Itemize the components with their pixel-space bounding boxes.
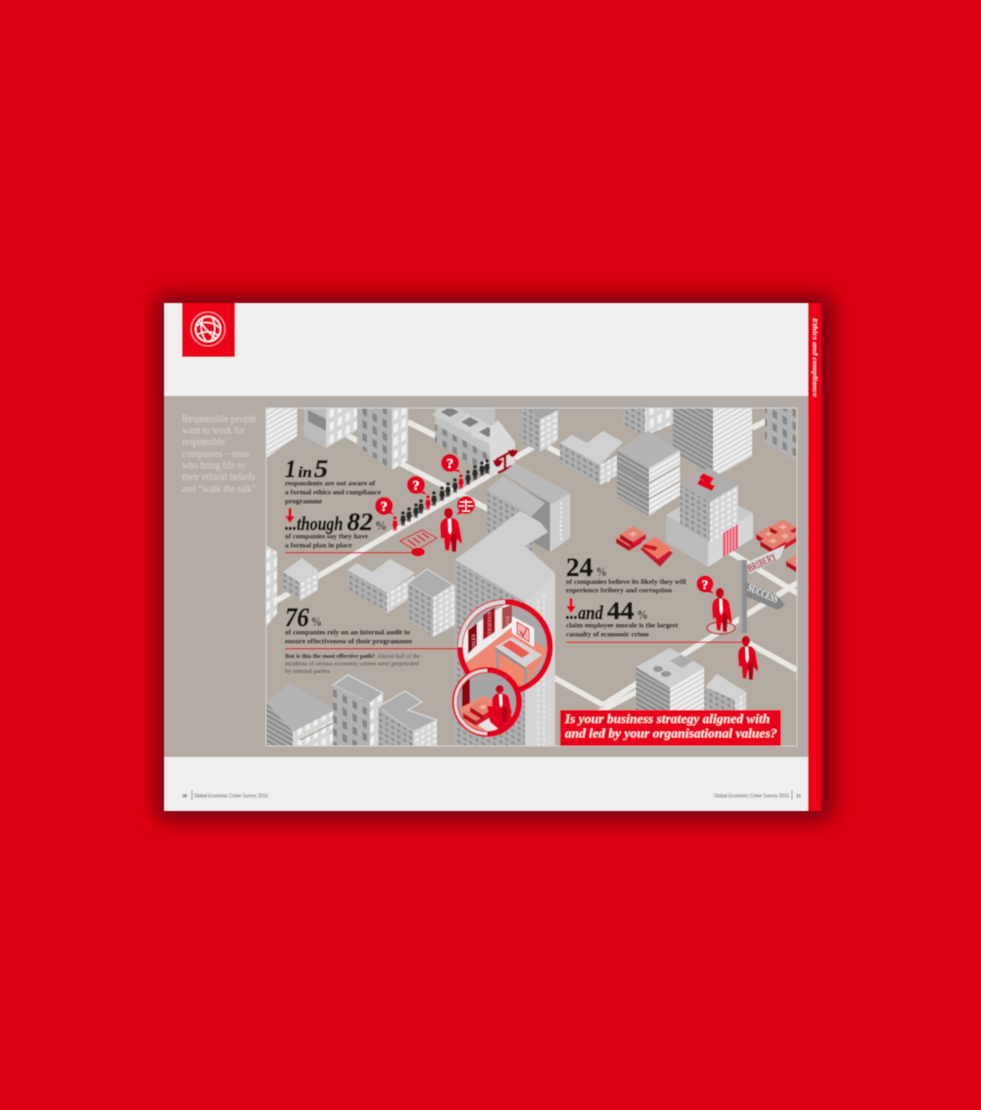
building: police station bbox=[666, 467, 753, 567]
stat: and 44%: ...and bbox=[566, 603, 603, 624]
stat: 76%: 76 bbox=[285, 603, 309, 632]
building: floors block bbox=[617, 431, 680, 516]
icon: scales on factory bbox=[493, 450, 518, 473]
stat: 24%: % bbox=[596, 564, 607, 579]
building: factory bbox=[432, 403, 518, 478]
panel: white page bbox=[164, 303, 808, 811]
callout: strategy question: and led by your organisational values? bbox=[565, 726, 777, 740]
icon: monitor bbox=[512, 616, 534, 651]
building: windows block bbox=[623, 408, 673, 436]
building: big striped tower bbox=[673, 408, 752, 478]
building: low L-block bbox=[347, 559, 415, 613]
note: internal parties bbox=[285, 653, 420, 675]
footer: left page: Global Economic Crime Survey 2015 bbox=[194, 794, 268, 800]
stat: and 44%: claim employee morale is the largest bbox=[566, 620, 679, 630]
callout: strategy question bbox=[560, 710, 781, 746]
intro text: who bring life to bbox=[182, 460, 245, 472]
stat: 1 in 5: programme bbox=[285, 496, 323, 506]
figure: man at signpost bbox=[712, 588, 732, 632]
icon: question bubble 1: ? bbox=[446, 457, 454, 472]
banner: vol: VOL bbox=[505, 615, 510, 625]
figure: walking man bbox=[738, 636, 758, 680]
page shadow bbox=[157, 296, 831, 819]
icon: question bubble 4: ? bbox=[702, 577, 708, 592]
stat: 76%: ensure effectiveness of their programmes bbox=[285, 636, 412, 646]
note: internal parties: Almost half of the bbox=[377, 653, 420, 660]
queue of people bbox=[392, 459, 490, 531]
stat: 76%: of companies rely on an internal audit to bbox=[285, 628, 410, 636]
footer: right page: 31 bbox=[796, 794, 802, 800]
stat: 1 in 5 bbox=[285, 456, 382, 506]
note: internal parties: by internal parties bbox=[285, 668, 330, 675]
icon: red globe badge bbox=[182, 303, 235, 357]
arrow: red down bbox=[285, 508, 295, 523]
banner: sales: SALES bbox=[471, 633, 476, 650]
stat: though 82%: % bbox=[375, 518, 387, 533]
building: L-shaped low block bbox=[560, 431, 623, 485]
intro text: responsible bbox=[182, 437, 225, 448]
panel: isometric city illustration bbox=[266, 403, 812, 746]
note: internal parties: incidents of serious economic crimes were perpetrated bbox=[285, 660, 420, 668]
intro text: want to work for bbox=[182, 426, 245, 436]
stat: 24% bbox=[566, 553, 686, 594]
stat: 24%: of companies believe its likely they will bbox=[566, 577, 686, 586]
figure: red man with scales bbox=[440, 508, 462, 552]
brochure spread bbox=[164, 303, 823, 811]
intro text bbox=[182, 414, 256, 495]
building: main tower bbox=[455, 511, 555, 746]
panel border bbox=[266, 408, 797, 746]
building: small tower bbox=[520, 408, 558, 452]
building: far right bbox=[765, 408, 796, 461]
stat: and 44% bbox=[566, 598, 746, 643]
stat: 76%: % bbox=[311, 614, 322, 629]
stat: and 44%: % bbox=[637, 607, 648, 622]
stat: and 44%: casualty of economic crime bbox=[566, 630, 650, 638]
stat: 1 in 5: 5 bbox=[314, 456, 328, 483]
target ring bbox=[707, 622, 735, 634]
building: small bottom right bbox=[705, 674, 746, 712]
stat: 1 in 5: 1 bbox=[285, 456, 296, 483]
building: tall office bbox=[357, 408, 408, 470]
intro text: Responsible people bbox=[182, 414, 256, 425]
stat: 1 in 5: respondents are not aware of bbox=[285, 478, 375, 488]
stat: 1 in 5: a formal ethics and compliance bbox=[285, 488, 382, 496]
callout: strategy question: Is your business strategy aligned with bbox=[564, 712, 770, 726]
building: bottom stepped bbox=[378, 691, 437, 746]
footer: right page: Global Economic Crime Survey 2015 bbox=[714, 794, 789, 800]
door bbox=[723, 524, 738, 557]
desk bbox=[495, 637, 542, 693]
footer: right page bbox=[714, 790, 802, 800]
building: terrace top-left bbox=[304, 408, 357, 448]
icon: question bubble 2: ? bbox=[412, 479, 420, 494]
footer: left page: 30 bbox=[182, 794, 188, 800]
icon: money piles bbox=[616, 519, 812, 574]
icon: question bubble 1 bbox=[441, 454, 461, 473]
panel: taupe band bbox=[164, 396, 808, 757]
footer: left page bbox=[182, 790, 268, 800]
icon: siren bbox=[697, 473, 715, 491]
arrow: red down 2 bbox=[566, 598, 576, 613]
signpost bbox=[739, 545, 785, 633]
icon: scales bubble bbox=[456, 496, 475, 515]
icon: credit cards bbox=[640, 537, 673, 567]
building: rooftop tower bottom right bbox=[636, 648, 704, 712]
stat: though 82%: 82 bbox=[347, 509, 373, 536]
intro text: companies – ones bbox=[182, 449, 249, 460]
icon: question bubble 3: ? bbox=[380, 500, 388, 515]
banner: strategy: STRATEGY bbox=[487, 610, 492, 637]
building: bottom-left wide bbox=[266, 683, 335, 746]
icon: question bubble 2 bbox=[407, 476, 427, 495]
figure: seated man bbox=[492, 685, 512, 722]
stat: 24%: 24 bbox=[566, 553, 593, 582]
panel: red side strip bbox=[808, 303, 823, 811]
stat: though 82%: a formal plan in place bbox=[285, 540, 353, 550]
building: small cube bbox=[283, 558, 318, 601]
intro text: their ethical beliefs bbox=[182, 472, 255, 483]
circle: office vignette bbox=[457, 599, 553, 700]
rule with dot bbox=[285, 548, 425, 556]
intro text: and “walk the talk” bbox=[182, 484, 256, 495]
icon: question bubble 3 bbox=[375, 497, 394, 515]
building: striped top-left bbox=[266, 408, 297, 458]
icon: question bubble 4 bbox=[696, 576, 714, 594]
sidebar label: Ethics and compliance bbox=[811, 317, 818, 397]
stat: though 82%: ...though bbox=[285, 514, 343, 535]
sign: success: SUCCESS bbox=[746, 583, 780, 606]
building: left edge bbox=[266, 545, 277, 627]
building: U-shaped back block bbox=[486, 464, 570, 552]
stat: 76% bbox=[285, 603, 457, 675]
stat: 24%: experience bribery and corruption bbox=[566, 586, 672, 594]
note: internal parties: But is this the most effective path? bbox=[285, 653, 375, 660]
icon: clipboard bbox=[400, 530, 437, 551]
stat: 1 in 5: in bbox=[298, 465, 312, 481]
stat: though 82%: of companies say they have bbox=[285, 532, 369, 540]
stat: and 44%: 44 bbox=[607, 598, 635, 625]
sign: bribery: BRIBERY bbox=[746, 551, 778, 575]
stat: though 82% bbox=[285, 509, 425, 556]
roads bbox=[266, 418, 797, 716]
circle: small vignette bbox=[452, 667, 522, 737]
building: stepped tower bbox=[408, 569, 455, 637]
building: bottom brick bbox=[333, 675, 383, 746]
